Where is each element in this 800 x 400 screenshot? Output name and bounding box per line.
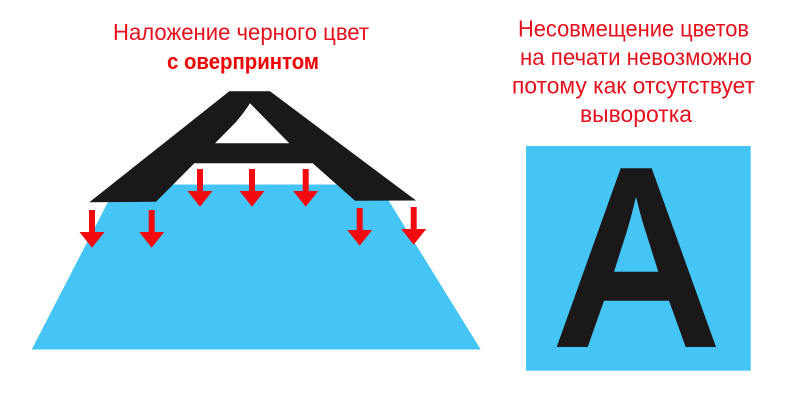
heading: right: потому как отсутствует (512, 72, 755, 98)
arrow 6 (347, 208, 372, 246)
heading: right: Несовмещение цветов (518, 16, 749, 42)
arrow 7 (401, 207, 426, 245)
arrow 2 (139, 210, 164, 248)
panel: blue trapezoid (32, 184, 481, 350)
arrow 3 (188, 169, 212, 207)
heading: left: с оверпринтом (167, 49, 319, 74)
heading: left (113, 19, 369, 74)
panel: blue square (526, 146, 751, 371)
arrow 5 (293, 169, 318, 207)
heading: right: выворотка (580, 101, 692, 127)
arrow 4 (240, 169, 264, 207)
letter A with overprint (89, 91, 416, 202)
heading: left: Наложение черного цвет (113, 19, 369, 45)
heading: right: на печати невозможно (520, 44, 752, 70)
arrow 1 (80, 210, 104, 248)
letter A on blue square (557, 168, 716, 347)
arrows (80, 169, 426, 248)
heading: right (512, 16, 755, 127)
